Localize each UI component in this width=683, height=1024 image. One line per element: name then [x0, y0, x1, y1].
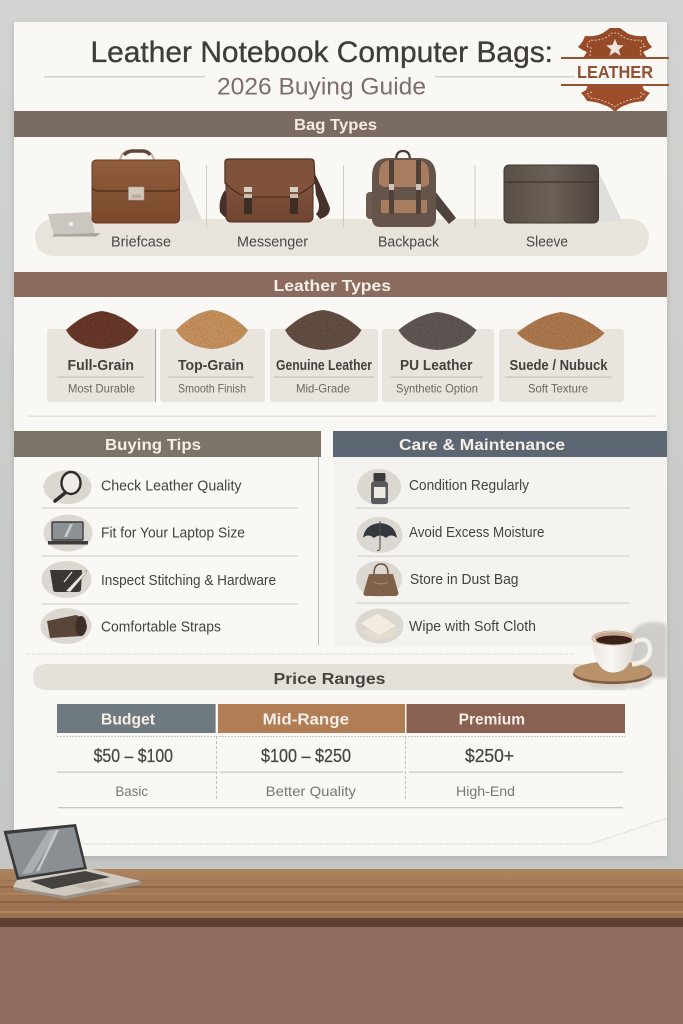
title: Leather Notebook Computer Bags:: [90, 36, 553, 69]
card: top-grain: [160, 310, 265, 402]
heading: price ranges: [33, 664, 625, 690]
care: condition regularly: Condition Regularly: [409, 477, 529, 494]
bag labels: Sleeve: [526, 234, 568, 250]
care: store in dust bag: [356, 561, 518, 597]
tip: inspect stitching: Inspect Stitching & Hardware: [101, 572, 276, 589]
icon: laptop on desk: [4, 824, 141, 899]
tip: comfortable straps: Comfortable Straps: [101, 619, 221, 636]
tip: fit laptop size: [44, 514, 245, 552]
tip: check leather quality: Check Leather Quality: [101, 478, 242, 495]
icon: laptop small: [48, 212, 101, 236]
heading: buying tips: Buying Tips: [105, 437, 201, 454]
column: budget: $50 – $100: [94, 746, 173, 766]
panel: bag types: [35, 150, 649, 256]
care: wipe with soft cloth: [356, 608, 536, 644]
bag labels: Messenger: [237, 234, 308, 250]
card: genuine leather: Genuine Leather: [276, 357, 372, 374]
card: top-grain: Smooth Finish: [178, 382, 246, 396]
column: premium: High-End: [456, 783, 515, 799]
care: avoid excess moisture: [356, 517, 544, 553]
bag labels: Briefcase: [111, 234, 171, 250]
panel: leather types: [47, 310, 624, 402]
card: genuine leather: [270, 310, 378, 402]
wall below desk: [0, 927, 683, 1024]
tip: fit laptop size: Fit for Your Laptop Size: [101, 525, 245, 542]
price table: [57, 704, 625, 808]
bag dividers: [206, 165, 475, 227]
card: suede nubuck: Suede / Nubuck: [510, 357, 608, 374]
icon: backpack: [366, 151, 456, 227]
shelf pill: [35, 219, 649, 256]
icon: sleeve: [504, 165, 622, 223]
column: mid-range: [218, 704, 405, 799]
column: mid-range: Mid-Range: [263, 711, 349, 728]
heading: care and maintenance: Care & Maintenance: [399, 437, 565, 454]
desk: [0, 869, 683, 928]
section band: bag types: Bag Types: [294, 117, 377, 134]
card: full-grain: Most Durable: [68, 382, 135, 396]
care: condition regularly: [357, 469, 529, 505]
card: full-grain: [47, 311, 156, 402]
card: pu leather: [382, 312, 494, 402]
card: pu leather: PU Leather: [400, 357, 473, 374]
care: avoid excess moisture: Avoid Excess Moisture: [409, 524, 544, 541]
section band: leather types: Leather Types: [274, 278, 391, 295]
panel: care and maintenance: [333, 431, 667, 647]
care: wipe with soft cloth: Wipe with Soft Cloth: [409, 618, 536, 635]
icon: briefcase: [92, 150, 202, 223]
heading: care and maintenance: [333, 431, 667, 457]
bag labels: [111, 234, 568, 250]
subtitle with rules: 2026 Buying Guide: [217, 74, 426, 100]
tip: check leather quality: [44, 470, 242, 504]
card: suede nubuck: [499, 312, 624, 402]
icon: coffee cup: [573, 622, 667, 689]
tip: comfortable straps: [40, 608, 221, 644]
column: mid-range: $100 – $250: [261, 746, 351, 766]
card: full-grain: Full-Grain: [68, 357, 134, 374]
icon: messenger bag: [220, 159, 330, 222]
card: pu leather: Synthetic Option: [396, 382, 478, 396]
column: budget: Basic: [115, 783, 148, 799]
tip: inspect stitching: [42, 561, 276, 598]
bag labels: Backpack: [378, 234, 439, 250]
card: genuine leather: Mid-Grade: [296, 382, 350, 396]
care: store in dust bag: Store in Dust Bag: [410, 571, 518, 588]
panel: buying tips: [14, 431, 321, 645]
leather badge: [561, 28, 669, 112]
card: suede nubuck: Soft Texture: [528, 382, 588, 396]
column: premium: $250+: [465, 746, 514, 766]
section band: leather types: [14, 272, 667, 297]
column: mid-range: Better Quality: [266, 783, 356, 799]
card: top-grain: Top-Grain: [178, 357, 244, 374]
column: budget: Budget: [101, 711, 156, 728]
section band: bag types: [14, 111, 667, 137]
heading: price ranges: Price Ranges: [274, 671, 386, 688]
heading: buying tips: [14, 431, 321, 457]
column: premium: Premium: [459, 711, 525, 728]
column: budget: [57, 704, 216, 799]
poster sheet: [14, 22, 667, 858]
column: premium: [406, 704, 625, 799]
leather badge: LEATHER: [577, 62, 653, 82]
